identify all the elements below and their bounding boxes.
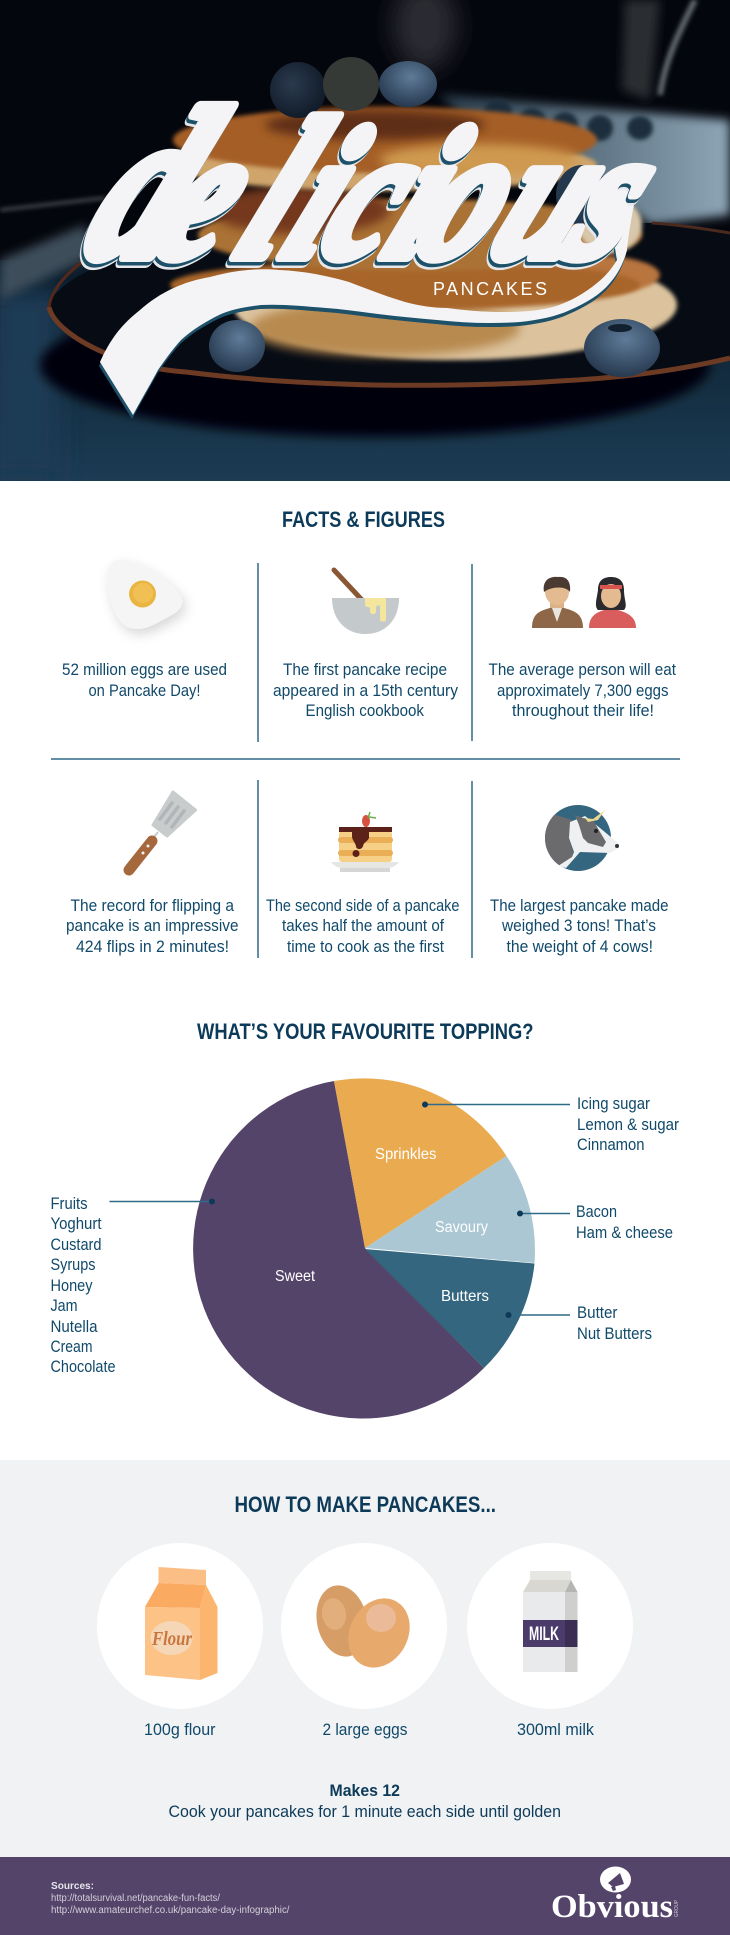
panel: fact dividers bbox=[51, 563, 680, 958]
second pancake bbox=[198, 199, 642, 271]
text: largest pancake fact: weighed 3 tons! That’s bbox=[501, 916, 656, 935]
slice: sprinkles: Sprinkles bbox=[375, 1146, 437, 1163]
icon: pancake stack bbox=[331, 812, 399, 872]
icon: man and woman bbox=[532, 577, 636, 628]
text: recipe fact bbox=[273, 660, 458, 720]
heading: favourite topping: WHAT’S YOUR FAVOURITE TOPPING? bbox=[197, 1019, 534, 1044]
callout: sweet toppings: Fruits bbox=[50, 1195, 88, 1213]
text: largest pancake fact bbox=[490, 896, 668, 956]
text: eggs fact: on Pancake Day! bbox=[88, 681, 200, 700]
callout: sweet toppings: Nutella bbox=[50, 1318, 98, 1336]
callout: sprinkles toppings: Lemon & sugar bbox=[577, 1116, 679, 1134]
text: flips fact: pancake is an impressive bbox=[66, 916, 238, 935]
heading: how to make pancakes: HOW TO MAKE PANCAKES... bbox=[234, 1492, 496, 1517]
title: delicious pancakes lettering bbox=[53, 66, 705, 419]
text: lifetime eggs fact: The average person will eat bbox=[488, 660, 676, 679]
text: second side fact: The second side of a pancake bbox=[266, 896, 460, 915]
label: 2 large eggs: 2 large eggs bbox=[322, 1721, 408, 1739]
label: 300ml milk: 300ml milk bbox=[517, 1721, 595, 1739]
bottom pancake bbox=[233, 250, 677, 360]
slice: sweet bbox=[193, 1081, 484, 1418]
pancakes word: PANCAKES bbox=[433, 279, 547, 299]
callout: sweet toppings: Cream bbox=[50, 1338, 92, 1356]
icon: spatula bbox=[129, 792, 196, 870]
callout: sweet toppings: Yoghurt bbox=[50, 1215, 102, 1233]
logo: obvious: GROUP bbox=[674, 1899, 680, 1917]
panel: fact recipe bbox=[273, 570, 458, 720]
text: recipe fact: English cookbook bbox=[306, 701, 424, 720]
slice: savoury bbox=[365, 1156, 535, 1263]
panel: fact lifetime eggs bbox=[488, 577, 676, 720]
swash underline bbox=[99, 165, 643, 419]
text: sources: Sources: bbox=[51, 1880, 94, 1892]
panel: fact largest pancake bbox=[490, 805, 668, 956]
icon: flour bag bbox=[145, 1567, 218, 1680]
text: recipe fact: appeared in a 15th century bbox=[273, 681, 458, 700]
slice: savoury: Savoury bbox=[435, 1219, 488, 1236]
delicious lettering: delicious bbox=[56, 66, 705, 303]
ingredient: eggs bbox=[281, 1543, 447, 1739]
text: largest pancake fact: The largest pancake made bbox=[490, 896, 668, 915]
slice: butters: Butters bbox=[441, 1288, 489, 1305]
callout: butters toppings: Nut Butters bbox=[577, 1325, 652, 1343]
text: sources: http://totalsurvival.net/pancake-fun-facts/ bbox=[51, 1893, 220, 1904]
text: second side fact bbox=[266, 896, 460, 956]
text: second side fact: time to cook as the first bbox=[287, 937, 444, 956]
text: largest pancake fact: the weight of 4 cows! bbox=[506, 937, 653, 956]
slice: butters bbox=[365, 1249, 534, 1368]
callout: sprinkles toppings: Cinnamon bbox=[577, 1136, 644, 1154]
text: flips fact bbox=[66, 896, 238, 956]
text: sources bbox=[51, 1880, 290, 1916]
logo: obvious: Obvious bbox=[551, 1889, 673, 1925]
text: lifetime eggs fact bbox=[488, 660, 676, 720]
pie chart: toppings bbox=[193, 1078, 535, 1418]
hero photo: pancake stack with blueberries bbox=[0, 0, 730, 481]
text: flips fact: 424 flips in 2 minutes! bbox=[76, 937, 229, 956]
ingredient: flour bbox=[97, 1543, 263, 1739]
text: lifetime eggs fact: approximately 7,300 eggs bbox=[497, 681, 668, 700]
callout: sweet toppings: Honey bbox=[50, 1277, 93, 1295]
text: eggs fact bbox=[62, 660, 227, 700]
delicious lettering: delicious bbox=[53, 72, 702, 309]
callout: butters toppings: Butter bbox=[577, 1304, 618, 1322]
icon: two eggs bbox=[310, 1581, 422, 1678]
icon: mixing bowl bbox=[332, 570, 399, 634]
callout: sweet toppings: Custard bbox=[50, 1236, 102, 1254]
text: makes 12: Makes 12 bbox=[330, 1781, 400, 1800]
text: eggs fact: 52 million eggs are used bbox=[62, 660, 227, 679]
callout: savoury toppings bbox=[517, 1203, 673, 1242]
callout: sweet toppings: Chocolate bbox=[50, 1358, 116, 1376]
callout: sweet toppings: Jam bbox=[50, 1297, 78, 1315]
logo: obvious bbox=[551, 1866, 680, 1925]
slice: sprinkles bbox=[334, 1078, 506, 1248]
text: cooking instruction: Cook your pancakes for 1 minute each side until golden bbox=[168, 1802, 561, 1821]
text: flips fact: The record for flipping a bbox=[70, 896, 234, 915]
text: recipe fact: The first pancake recipe bbox=[283, 660, 447, 679]
heading: facts and figures: FACTS & FIGURES bbox=[282, 507, 445, 532]
ingredient: milk bbox=[467, 1543, 633, 1739]
callout: savoury toppings: Bacon bbox=[576, 1203, 617, 1221]
delicious lettering: delicious bbox=[54, 69, 703, 307]
text: sources: http://www.amateurchef.co.uk/pancake-day-infographic/ bbox=[51, 1905, 290, 1916]
slice: sweet: Sweet bbox=[275, 1268, 316, 1285]
icon: cow bbox=[540, 805, 619, 871]
icon: milk carton bbox=[523, 1571, 578, 1672]
icon: fried egg bbox=[107, 560, 182, 629]
text: lifetime eggs fact: throughout their life! bbox=[512, 701, 654, 720]
callout: sprinkles toppings: Icing sugar bbox=[577, 1095, 650, 1113]
callout: sweet toppings bbox=[50, 1195, 215, 1376]
third pancake bbox=[170, 260, 640, 310]
label: 100g flour: 100g flour bbox=[144, 1721, 216, 1739]
top pancake bbox=[194, 152, 600, 194]
callout: sweet toppings: Syrups bbox=[50, 1256, 96, 1274]
callout: savoury toppings: Ham & cheese bbox=[576, 1224, 673, 1242]
panel: fact flips bbox=[66, 792, 238, 956]
panel: fact eggs bbox=[62, 560, 227, 700]
footer bbox=[0, 1857, 730, 1935]
panel: fact second side bbox=[266, 812, 460, 956]
text: second side fact: takes half the amount of bbox=[282, 916, 444, 935]
panel: how to make pancakes bbox=[0, 1460, 730, 1857]
icon: flour bag: Flour bbox=[151, 1628, 192, 1650]
blueberries bbox=[270, 62, 326, 118]
callout: butters toppings bbox=[506, 1304, 652, 1343]
callout: sprinkles toppings bbox=[422, 1095, 679, 1154]
icon: milk carton: MILK bbox=[529, 1624, 559, 1645]
